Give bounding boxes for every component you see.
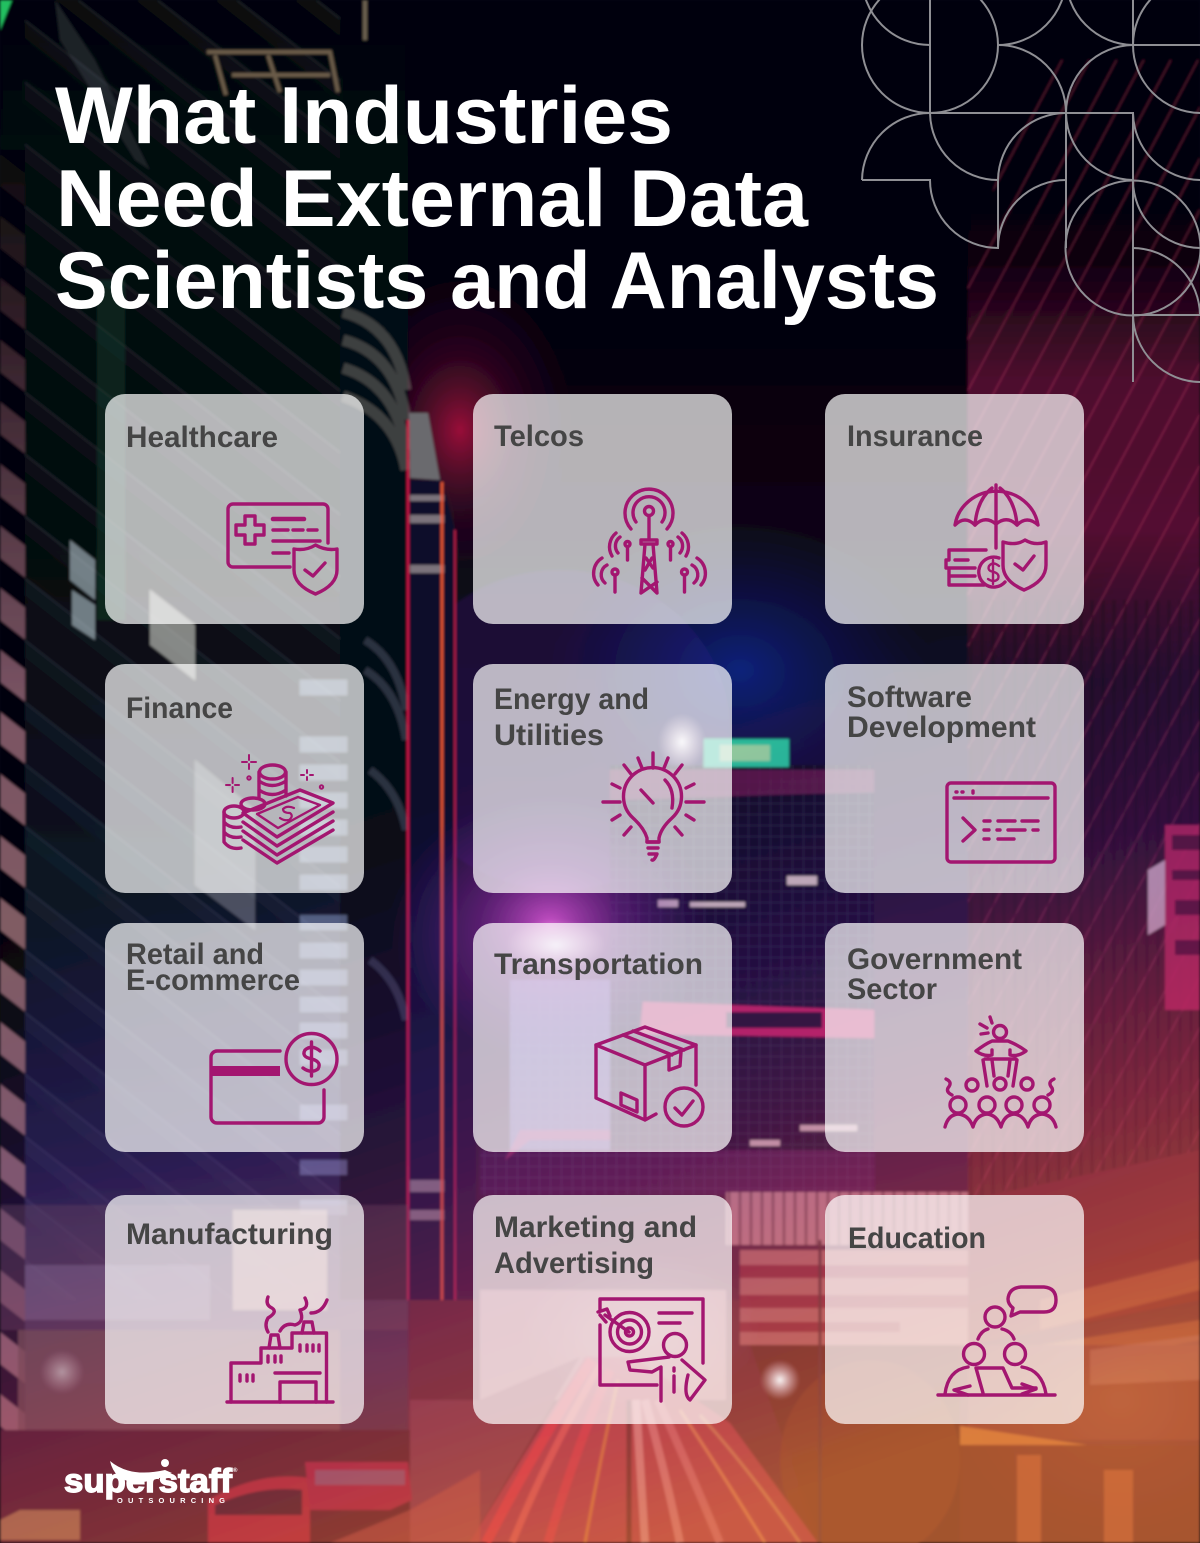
label: Retail and E-commerce: Retail and (126, 938, 264, 971)
title (55, 71, 939, 326)
panel: Software Development (825, 664, 1084, 893)
panel: Government Sector (825, 923, 1084, 1152)
label: Software Development (847, 681, 1036, 744)
icon: umbrella, coins and shield (946, 485, 1046, 590)
logo: superstaff outsourcing: superstaff (64, 1462, 233, 1499)
title: Scientists and Analysts (55, 236, 939, 326)
label: Finance: Finance (126, 692, 233, 725)
panel: Finance (105, 664, 364, 893)
panel: Retail and E-commerce (105, 923, 364, 1152)
label: Energy and Utilities (494, 683, 649, 752)
title: Need External Data (56, 154, 809, 244)
icon: discussion group (938, 1287, 1056, 1395)
label: Energy and Utilities: Energy and (494, 683, 649, 716)
label: Government Sector (847, 943, 1022, 1006)
icon: speaker addressing crowd (945, 1017, 1056, 1127)
panel: Insurance (825, 394, 1084, 624)
icon: code window (947, 783, 1055, 862)
panel: Telcos (473, 394, 732, 624)
panel: Education (825, 1195, 1084, 1424)
label: Telcos: Telcos (494, 420, 584, 453)
logo: superstaff outsourcing: ® (233, 1467, 238, 1474)
icon: telecom tower (594, 489, 705, 593)
icon: credit card with dollar coin (211, 1034, 337, 1123)
label: Retail and E-commerce: E-commerce (126, 964, 300, 997)
panel: Manufacturing (105, 1195, 364, 1424)
label: Marketing and Advertising (494, 1211, 697, 1280)
label: Marketing and Advertising: Marketing and (494, 1211, 697, 1244)
label: Insurance: Insurance (847, 420, 983, 453)
icon: presenter with target board (598, 1299, 705, 1401)
title: What Industries (55, 71, 673, 161)
panel: Transportation (473, 923, 732, 1152)
label: Healthcare: Healthcare (126, 421, 278, 454)
icon: money stack and coins (224, 755, 333, 863)
panel: Healthcare (105, 394, 364, 624)
label: Transportation: Transportation (494, 948, 703, 981)
label: Government Sector: Sector (847, 973, 937, 1006)
label: Manufacturing: Manufacturing (126, 1218, 333, 1251)
label: Government Sector: Government (847, 943, 1022, 976)
label: Software Development: Development (847, 711, 1036, 744)
icon: medical card with shield (228, 504, 337, 594)
decorative geometric line pattern (862, 0, 1200, 382)
icon: factory with smoke (227, 1297, 333, 1402)
logo: superstaff outsourcing: OUTSOURCING (117, 1496, 228, 1505)
label: Retail and E-commerce (126, 938, 300, 997)
label: Education: Education (848, 1222, 986, 1255)
icon: light bulb with rays (603, 753, 704, 860)
panel: Marketing and Advertising (473, 1195, 732, 1424)
panel: Energy and Utilities (473, 664, 732, 893)
label: Energy and Utilities: Utilities (494, 719, 604, 752)
label: Software Development: Software (847, 681, 972, 714)
label: Marketing and Advertising: Advertising (494, 1247, 654, 1280)
icon: package with check (596, 1027, 703, 1126)
